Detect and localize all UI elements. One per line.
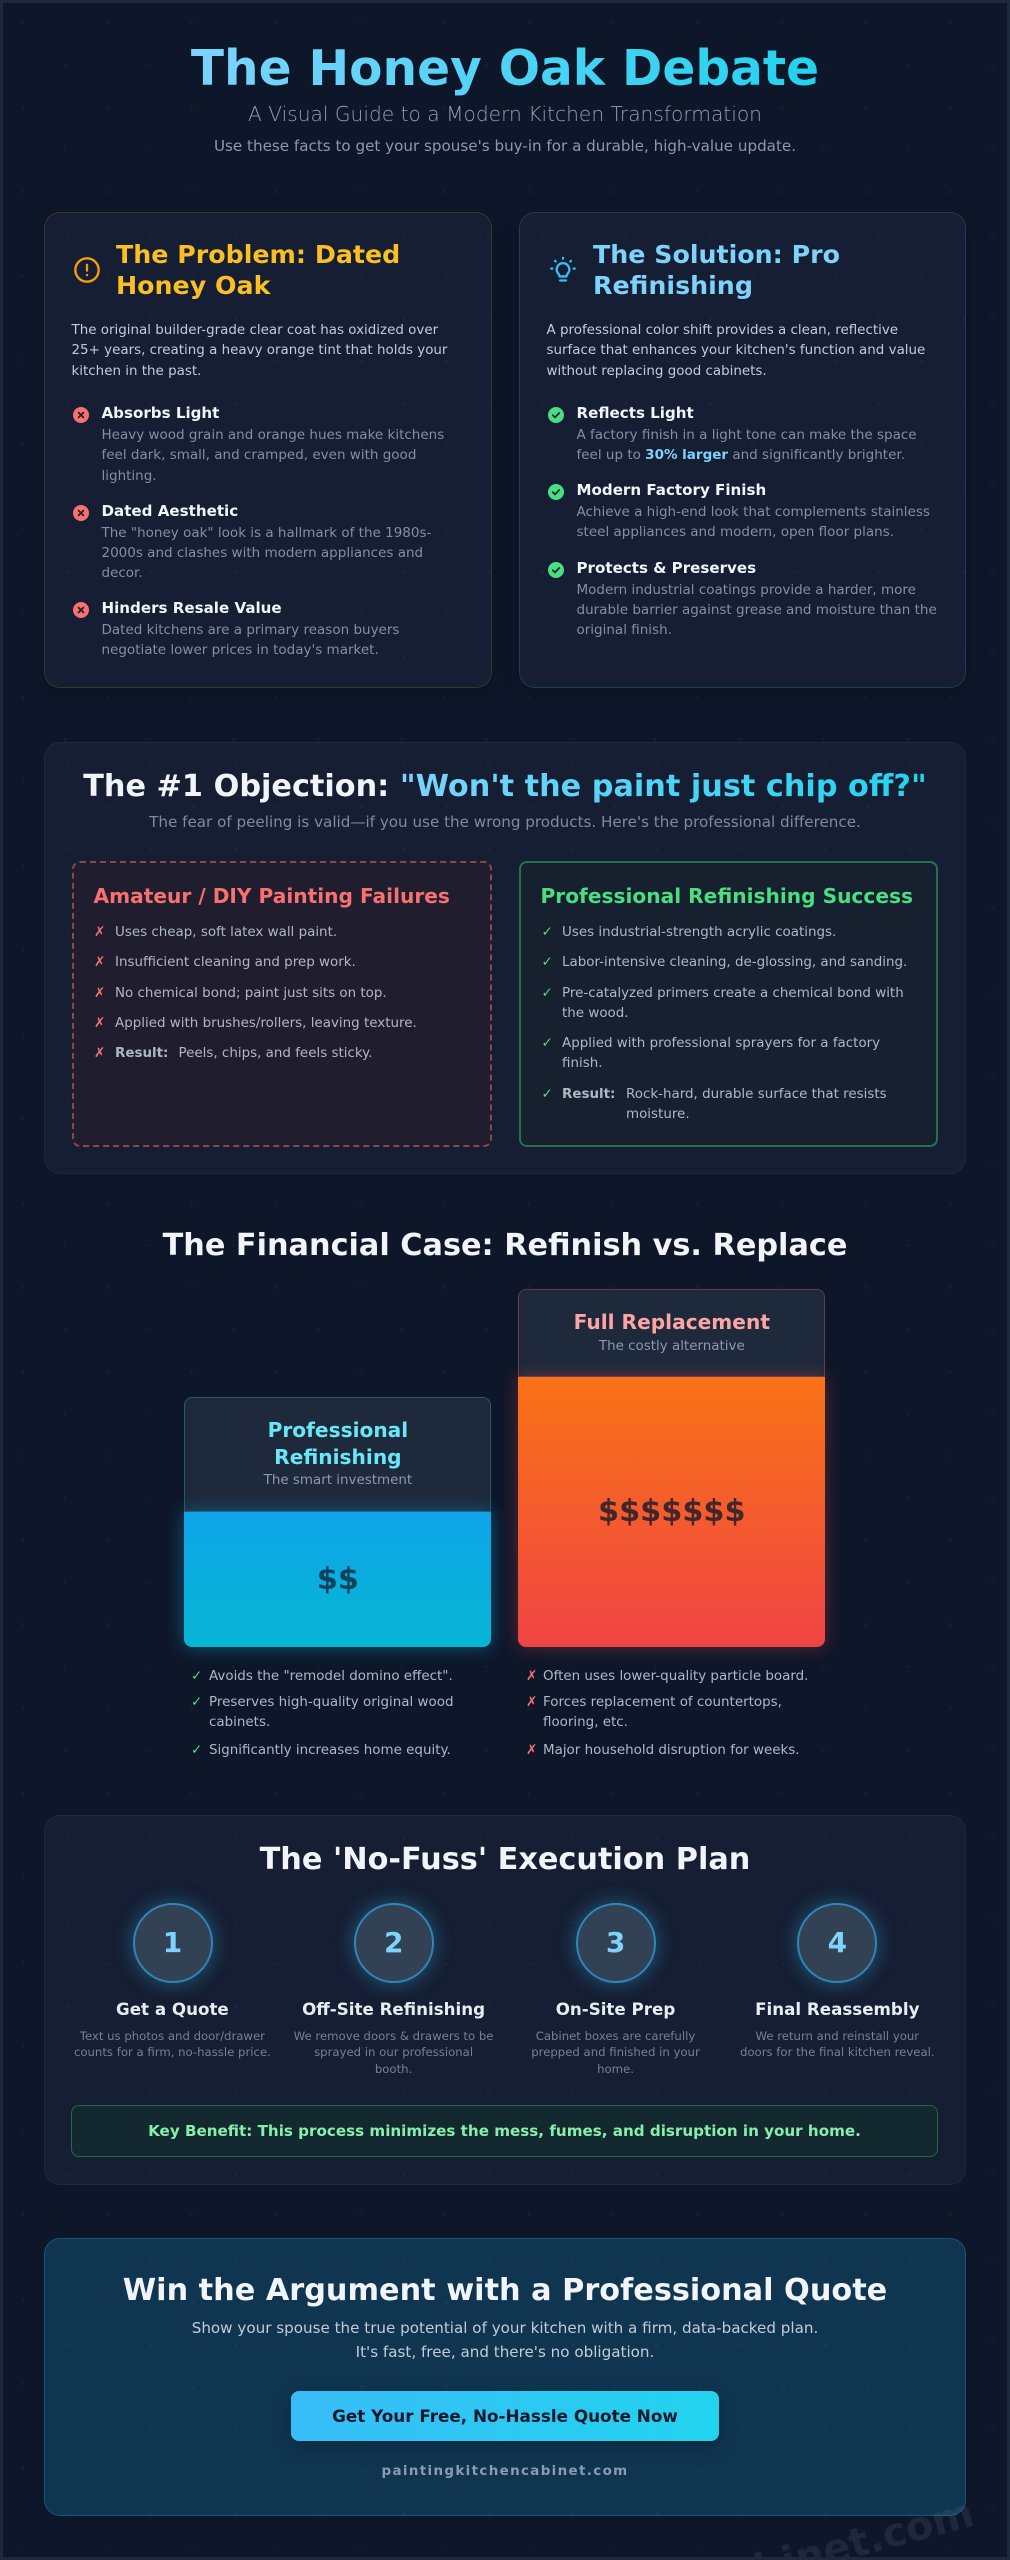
heading: Professional Refinishing Success: [540, 884, 913, 908]
step text: We return and reinstall your: [755, 2029, 919, 2043]
step number: [354, 1903, 434, 1983]
bar title: Refinishing: [274, 1445, 402, 1469]
panel: professional success: [518, 860, 938, 1147]
list: the wood.: [562, 1006, 629, 1021]
description: negotiate lower prices in today's market.: [102, 642, 379, 658]
list: ✓: [542, 1036, 553, 1051]
button: [291, 2391, 719, 2441]
description: 2000s and clashes with modern appliances and: [102, 545, 423, 561]
list: [542, 925, 907, 1122]
heading: Win the Argument with a Professional Quote: [123, 2273, 887, 2308]
paragraph: surface that enhances your kitchen's function and value: [546, 343, 925, 358]
step number: [797, 1903, 877, 1983]
website: paintingkitchencabinet.com: [381, 2464, 629, 2479]
step number: [576, 1903, 656, 1983]
list: Result:: [562, 1086, 615, 1102]
paragraph: The original builder-grade clear coat has oxidized over: [72, 323, 438, 338]
panel: call to action: [44, 2238, 966, 2516]
item: absorbs light: Absorbs Light: [102, 404, 219, 422]
list: replacement drawbacks: ✗: [526, 1695, 537, 1710]
paragraph: without replacing good cabinets.: [546, 364, 767, 379]
list: replacement drawbacks: [526, 1668, 808, 1758]
step text: [294, 2029, 494, 2076]
bar note: The smart investment: [264, 1473, 412, 1488]
list: ✗: [94, 925, 105, 940]
list: Applied with professional sprayers for a factory: [562, 1036, 880, 1051]
chart: cost comparison: [172, 1289, 836, 1758]
item: dated aesthetic: Dated Aesthetic: [102, 502, 238, 520]
description: Modern industrial coatings provide a harder, more: [576, 582, 916, 598]
step 3: [531, 1892, 700, 2076]
description: Dated kitchens are a primary reason buyers: [102, 622, 399, 638]
step number: 2: [384, 1926, 403, 1959]
paragraph: [546, 323, 925, 379]
step text: home.: [597, 2062, 634, 2076]
list: Result:: [115, 1046, 168, 1061]
heading: Honey Oak: [116, 271, 270, 300]
step text: Text us photos and door/drawer: [80, 2029, 265, 2043]
list: moisture.: [626, 1107, 690, 1122]
icon: x 1: [73, 407, 89, 423]
step text: prepped and finished in your: [531, 2045, 700, 2059]
list: replacement drawbacks: ✗: [526, 1668, 537, 1684]
bar title: Full Replacement: [574, 1310, 770, 1334]
list: replacement drawbacks: Often uses lower-quality particle board.: [543, 1668, 808, 1684]
list: Pre-catalyzed primers create a chemical bond with: [562, 986, 904, 1000]
list: refinishing benefits: Preserves high-quality original wood: [209, 1695, 454, 1710]
body text: [192, 2319, 818, 2361]
title: The Honey Oak Debate: [191, 41, 819, 97]
bar title: Professional: [268, 1418, 408, 1442]
description: [102, 427, 444, 484]
list: replacement drawbacks: Major household disruption for weeks.: [543, 1742, 800, 1758]
heading: The Problem: Dated: [116, 240, 400, 269]
step title: Final Reassembly: [755, 1999, 919, 2019]
list: ✗: [94, 1016, 105, 1031]
tagline: Use these facts to get your spouse's buy-in for a durable, high-value update.: [214, 137, 796, 155]
description: [102, 622, 399, 658]
panel: objection: [44, 742, 966, 1174]
heading: Amateur / DIY Painting Failures: [94, 884, 450, 908]
list: Uses cheap, soft latex wall paint.: [115, 925, 337, 940]
subtitle: A Visual Guide to a Modern Kitchen Transformation: [248, 102, 762, 126]
icon: check 2: [548, 484, 564, 500]
bar: professional refinishing: [172, 1397, 502, 1658]
paragraph: 25+ years, creating a heavy orange tint that holds your: [72, 343, 447, 358]
step 4: [740, 1892, 935, 2059]
step text: We remove doors & drawers to be: [294, 2029, 494, 2043]
bar header: [518, 1289, 825, 1377]
button: Get Your Free, No-Hassle Quote Now: [332, 2406, 678, 2426]
heading: The Solution: Pro: [593, 240, 840, 269]
paragraph: A professional color shift provides a clean, reflective: [546, 323, 898, 338]
step text: [74, 2029, 271, 2059]
list: Insufficient cleaning and prep work.: [115, 955, 356, 970]
description: steel appliances and modern, open floor plans.: [576, 524, 894, 540]
panel: amateur failures: [72, 860, 492, 1147]
icon: x 3: [73, 602, 89, 618]
list: refinishing benefits: Avoids the "remodel domino effect".: [209, 1668, 453, 1684]
bar fill: [184, 1512, 491, 1647]
description: durable barrier against grease and moisture than the: [576, 602, 937, 618]
header: [191, 41, 819, 155]
step text: Cabinet boxes are carefully: [536, 2029, 695, 2043]
heading: financial case: The Financial Case: Refinish vs. Replace: [163, 1228, 847, 1263]
description: [101, 524, 431, 581]
subheading: The fear of peeling is valid—if you use the wrong products. Here's the professional difference.: [149, 813, 861, 831]
heading: [593, 240, 840, 300]
step title: Off-Site Refinishing: [302, 1999, 485, 2019]
bar fill: $$$$$$$: [598, 1494, 746, 1529]
paragraph: [71, 323, 448, 379]
bar title: [268, 1418, 408, 1469]
description: The "honey oak" look is a hallmark of the 1980s-: [102, 524, 431, 540]
body text: Show your spouse the true potential of your kitchen with a firm, data-backed plan.: [192, 2319, 818, 2337]
description: [576, 582, 937, 638]
step 2: [294, 1892, 494, 2076]
icon: x 2: [73, 505, 89, 521]
step number: 4: [828, 1926, 847, 1959]
item: hinders resale value: Hinders Resale Value: [102, 599, 282, 617]
list: ✓: [542, 1086, 553, 1102]
step number: 1: [163, 1926, 182, 1959]
list: Uses industrial-strength acrylic coatings.: [562, 925, 836, 940]
step title: Get a Quote: [116, 1999, 229, 2019]
list: finish.: [562, 1056, 603, 1071]
list: [94, 925, 417, 1061]
step text: booth.: [375, 2062, 412, 2076]
step text: [531, 2029, 700, 2076]
list: refinishing benefits: ✓: [191, 1742, 202, 1758]
body text: It's fast, free, and there's no obligation.: [356, 2343, 654, 2361]
list: No chemical bond; paint just sits on top.: [115, 986, 387, 1000]
heading: The #1 Objection: "Won't the paint just chip off?": [83, 768, 927, 804]
list: replacement drawbacks: flooring, etc.: [543, 1715, 628, 1730]
step title: On-Site Prep: [556, 1999, 675, 2019]
list: Peels, chips, and feels sticky.: [178, 1046, 372, 1061]
list: ✓: [542, 986, 553, 1000]
icon: check 3: [548, 562, 564, 578]
panel: execution plan: [44, 1815, 966, 2185]
heading: The 'No-Fuss' Execution Plan: [260, 1842, 750, 1876]
item: reflects light: Reflects Light: [576, 404, 694, 422]
description: feel up to 30% larger and significantly brighter.: [576, 447, 905, 463]
list: ✗: [94, 986, 105, 1000]
list: refinishing benefits: ✓: [191, 1695, 202, 1710]
item: protects and preserves: Protects & Preserves: [576, 558, 756, 576]
list: refinishing benefits: Significantly increases home equity.: [209, 1742, 451, 1758]
description: decor.: [102, 565, 143, 581]
icon: check 1: [548, 407, 564, 423]
list: ✗: [94, 955, 105, 970]
key benefit callout: [71, 2105, 938, 2157]
description: lighting.: [102, 468, 157, 484]
description: [576, 427, 917, 463]
step text: sprayed in our professional: [314, 2045, 473, 2059]
description: original finish.: [576, 622, 672, 638]
icon: light bulb: [550, 256, 576, 282]
list: replacement drawbacks: Forces replacement of countertops,: [543, 1695, 782, 1710]
step 1: [74, 1892, 271, 2059]
panel: the solution: [519, 212, 966, 688]
bar: full replacement: [508, 1289, 836, 1658]
step text: counts for a firm, no-hassle price.: [74, 2045, 271, 2059]
description: Achieve a high-end look that complements stainless: [576, 504, 930, 520]
list: Rock-hard, durable surface that resists: [626, 1086, 887, 1102]
list: ✗: [94, 1046, 105, 1061]
list: Applied with brushes/rollers, leaving texture.: [115, 1016, 417, 1031]
description: [576, 504, 930, 540]
step text: doors for the final kitchen reveal.: [740, 2045, 935, 2059]
heading: Refinishing: [593, 271, 753, 300]
step number: 3: [606, 1926, 625, 1959]
paragraph: kitchen in the past.: [72, 364, 201, 379]
key benefit callout: Key Benefit: This process minimizes the mess, fumes, and disruption in your home.: [148, 2122, 861, 2140]
icon: warning circle: [74, 257, 100, 283]
list: Labor-intensive cleaning, de-glossing, and sanding.: [562, 955, 907, 970]
bar header: [184, 1397, 491, 1512]
description: A factory finish in a light tone can make the space: [576, 427, 917, 443]
list: replacement drawbacks: ✗: [526, 1742, 537, 1758]
bar note: The costly alternative: [599, 1338, 745, 1354]
list: ✓: [542, 925, 553, 940]
description: Heavy wood grain and orange hues make kitchens: [102, 427, 444, 443]
list: refinishing benefits: [191, 1668, 454, 1758]
item: modern factory finish: Modern Factory Finish: [576, 481, 766, 499]
list: refinishing benefits: cabinets.: [209, 1715, 270, 1730]
bar fill: $$: [317, 1562, 359, 1597]
list: ✓: [542, 955, 553, 970]
heading: [116, 240, 400, 300]
description: feel dark, small, and cramped, even with good: [102, 447, 416, 463]
list: refinishing benefits: ✓: [191, 1668, 202, 1684]
bar fill: [518, 1377, 825, 1647]
panel: the problem: [44, 212, 492, 688]
step text: [740, 2029, 935, 2059]
step number: [132, 1903, 212, 1983]
